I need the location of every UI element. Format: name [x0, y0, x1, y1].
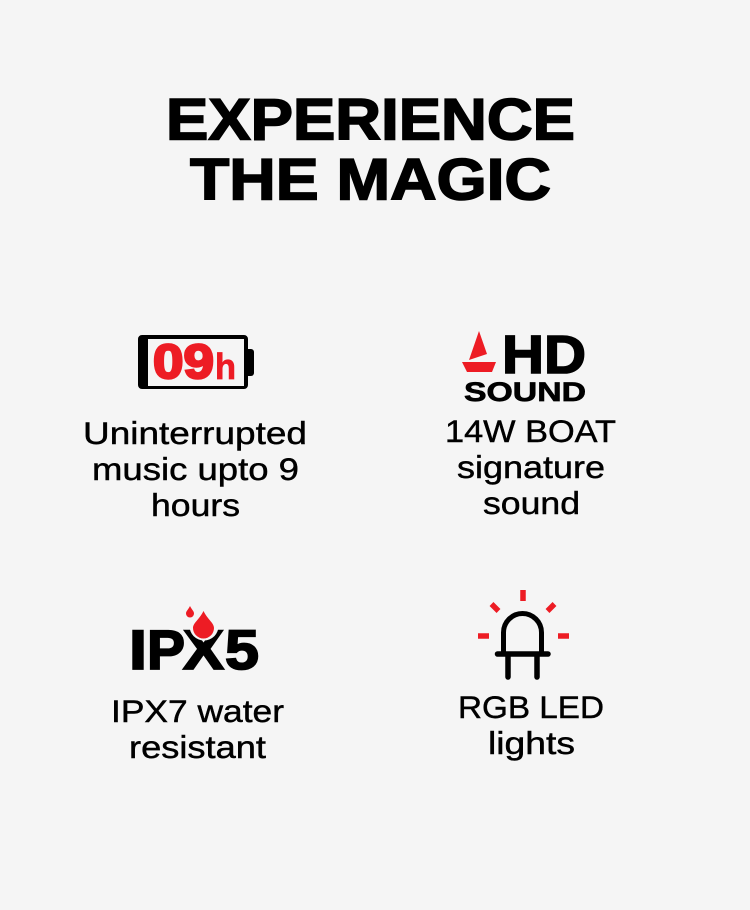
icon: battery 09h: 09	[153, 336, 214, 389]
text: water description: resistant	[129, 729, 266, 765]
icon: IPX5 logo: X	[183, 618, 224, 681]
panel: water resistance feature	[111, 606, 284, 765]
text: sound description: sound	[483, 485, 580, 521]
panel: battery feature	[83, 335, 307, 523]
text: water description: IPX7 water	[111, 693, 284, 729]
icon: HD sound logo: HD	[502, 325, 586, 385]
icon: LED bulb with rays	[478, 590, 569, 677]
text: battery description	[83, 415, 307, 523]
title: EXPERIENCE	[166, 88, 575, 152]
icon: HD sound logo: SOUND	[464, 377, 586, 407]
icon: IPX5 logo: I	[129, 618, 147, 681]
title	[166, 88, 575, 212]
title: THE MAGIC	[190, 148, 551, 212]
panel: LED feature	[458, 590, 604, 761]
icon: HD sound logo	[462, 325, 586, 407]
text: water description	[111, 693, 284, 765]
text: battery description: Uninterrupted	[83, 415, 307, 451]
icon: IPX5 logo: P	[147, 618, 185, 681]
text: sound description: signature	[457, 449, 605, 485]
text: battery description: hours	[151, 487, 240, 523]
icon: IPX5 logo: 5	[225, 618, 259, 681]
icon: IPX5 logo	[129, 606, 259, 681]
icon: battery 09h	[138, 335, 254, 389]
text: LED description: lights	[488, 725, 575, 761]
text: LED description	[458, 689, 604, 761]
icon: battery 09h: h	[215, 346, 236, 387]
text: LED description: RGB LED	[458, 689, 604, 725]
text: sound description: 14W BOAT	[445, 413, 616, 449]
panel: HD sound feature	[445, 325, 616, 521]
text: sound description	[445, 413, 616, 521]
text: battery description: music upto 9	[92, 451, 299, 487]
